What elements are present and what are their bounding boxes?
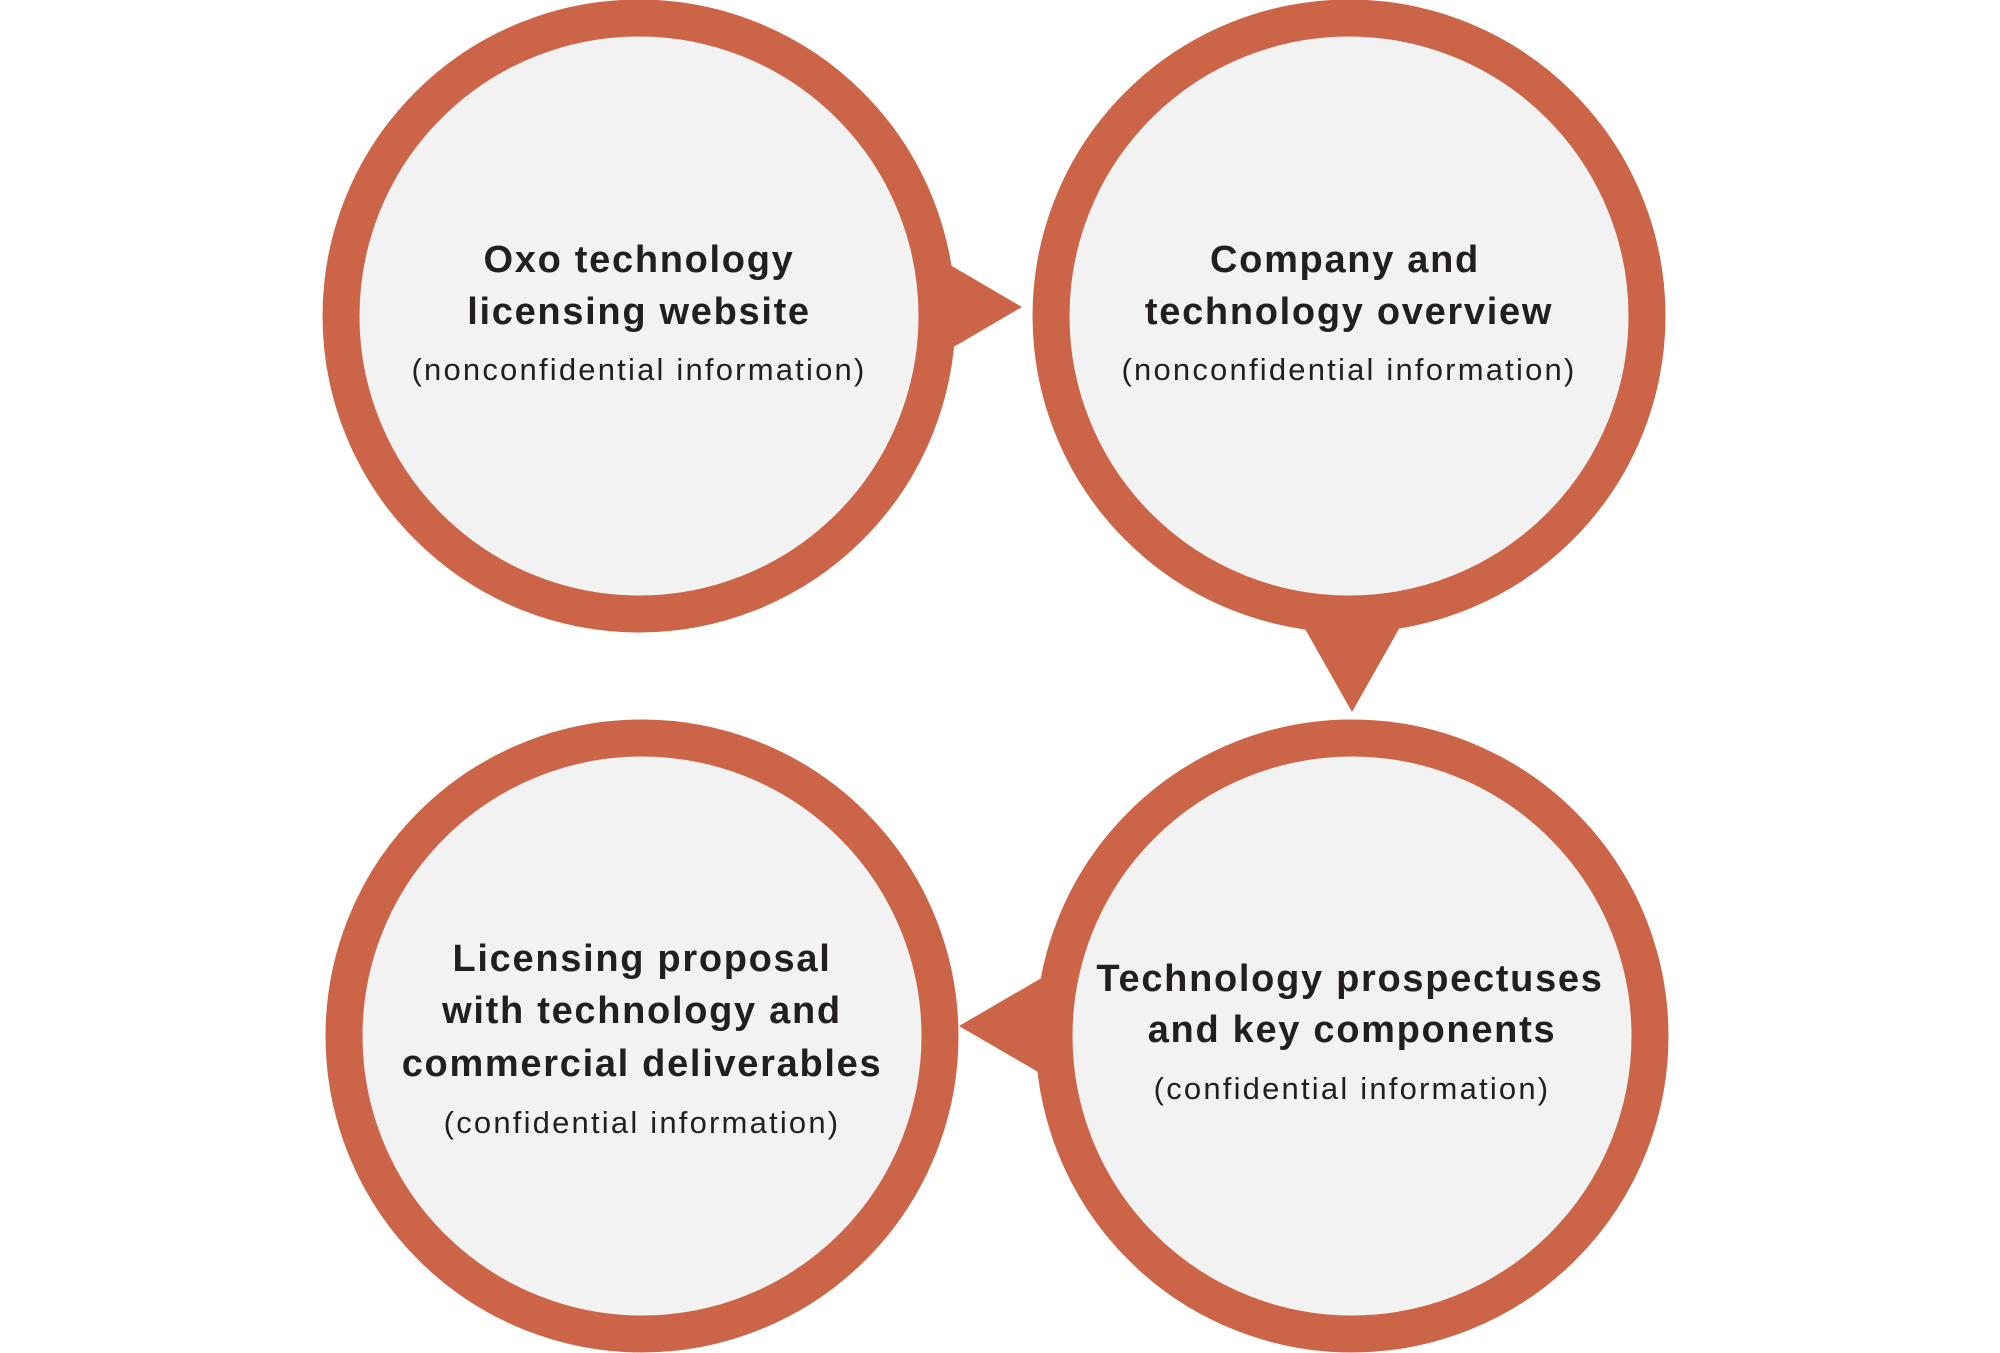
panel: Technology prospectuses and key components: Technology prospectuses <box>1096 958 1604 1000</box>
panel: Company and technology overview: technology overview <box>1145 291 1553 333</box>
panel: Oxo technology licensing website: Oxo technology <box>484 239 794 281</box>
panel: Licensing proposal: Licensing proposal <box>453 938 831 980</box>
panel: Licensing proposal <box>344 738 940 1334</box>
arrow: circle 3 to circle 4 <box>959 976 1045 1076</box>
arrow: circle 1 to circle 2 <box>945 262 1022 352</box>
arrow: circle 2 to circle 3 <box>1300 620 1404 712</box>
panel: Company and technology overview: (nonconfidential information) <box>1122 352 1576 387</box>
panel: Company and technology overview: Company and <box>1210 239 1480 281</box>
panel: Technology prospectuses and key components: and key components <box>1148 1009 1556 1051</box>
panel: Oxo technology licensing website: (nonconfidential information) <box>412 352 866 387</box>
panel: Licensing proposal: with technology and <box>441 990 842 1032</box>
panel: Technology prospectuses and key components <box>1054 738 1650 1334</box>
panel: Oxo technology licensing website: licensing website <box>467 291 811 333</box>
panel: Licensing proposal: commercial deliverables <box>402 1043 882 1085</box>
panel: Technology prospectuses and key components: (confidential information) <box>1154 1071 1550 1106</box>
panel: Licensing proposal: (confidential information) <box>444 1105 840 1140</box>
panel: Oxo technology licensing website <box>341 18 937 614</box>
panel: Company and technology overview <box>1051 18 1647 614</box>
